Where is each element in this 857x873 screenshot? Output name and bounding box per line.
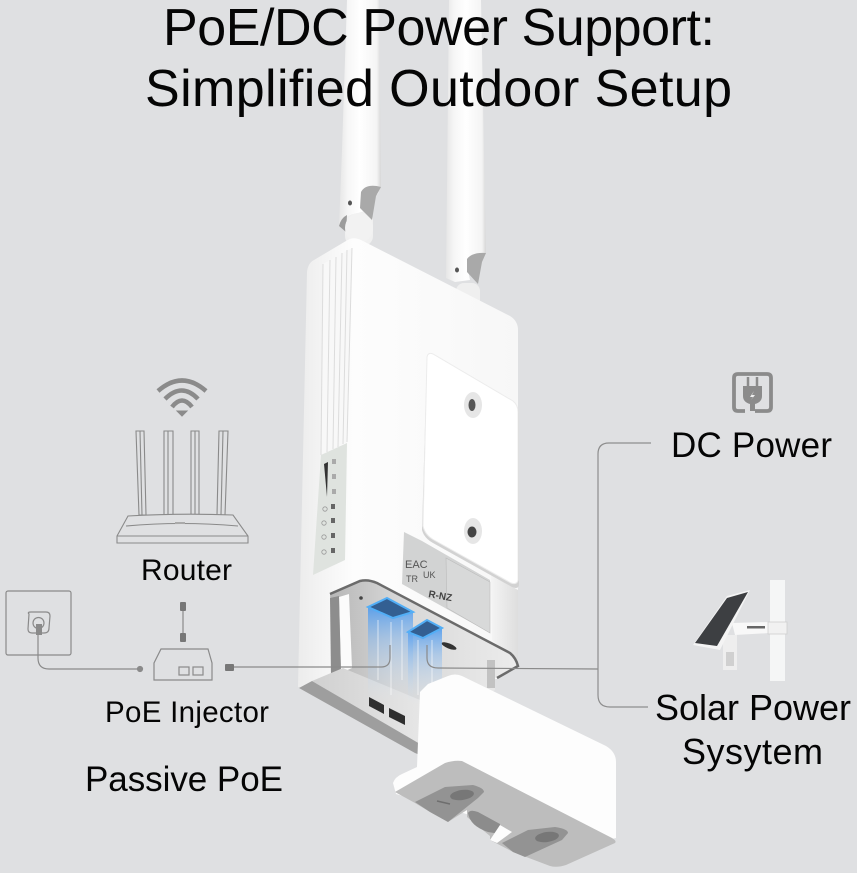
cap right recess — [502, 827, 568, 857]
port cavity — [299, 580, 518, 755]
icon: wall socket with cable — [6, 591, 142, 672]
title: PoE/DC Power Support: — [163, 0, 715, 57]
router body — [298, 238, 519, 755]
cap gray underside — [395, 761, 616, 867]
ventilation grille — [321, 248, 352, 455]
side wall below plate — [491, 575, 518, 664]
right antenna — [446, 0, 486, 309]
certification label: TR — [406, 574, 418, 584]
screw hole bottom — [464, 518, 482, 544]
lower flap — [312, 668, 420, 744]
cap white lip — [490, 825, 512, 843]
cap white shell — [393, 674, 616, 850]
device main shell — [298, 238, 518, 690]
certification label: UK — [423, 570, 436, 580]
bracket arm — [732, 622, 770, 635]
LED strip — [313, 443, 347, 575]
mounting plate — [422, 353, 519, 588]
solar panel — [693, 590, 750, 650]
title — [145, 0, 732, 118]
label: solar power system — [655, 687, 851, 772]
left PoE cable — [232, 645, 390, 667]
label: Passive PoE: Passive PoE — [85, 760, 283, 799]
connector bracket — [598, 443, 651, 707]
protective cap — [393, 674, 616, 867]
label: DC power: DC Power — [671, 426, 832, 465]
icon: wifi — [158, 380, 206, 416]
right power cable — [427, 645, 598, 669]
certification label: EAC — [405, 559, 428, 571]
certification label: R-NZ — [427, 589, 453, 604]
certification label — [402, 532, 490, 633]
label: router: Router — [141, 554, 232, 587]
icon: home router — [117, 431, 248, 543]
left antenna — [339, 0, 381, 246]
cap left recess — [415, 785, 484, 822]
label: solar power system: Sysytem — [682, 731, 823, 772]
label: PoE injector: PoE Injector — [105, 696, 269, 729]
label: solar power system: Solar Power — [655, 687, 851, 728]
cap center slot — [468, 811, 500, 834]
screw hole top — [464, 392, 482, 418]
title: Simplified Outdoor Setup — [145, 60, 732, 118]
blue port glow — [368, 598, 442, 704]
solar power system — [693, 580, 787, 681]
icon: DC plug — [734, 374, 771, 411]
pole — [770, 580, 785, 681]
icon: PoE injector — [154, 602, 234, 680]
lower ports — [369, 697, 405, 725]
